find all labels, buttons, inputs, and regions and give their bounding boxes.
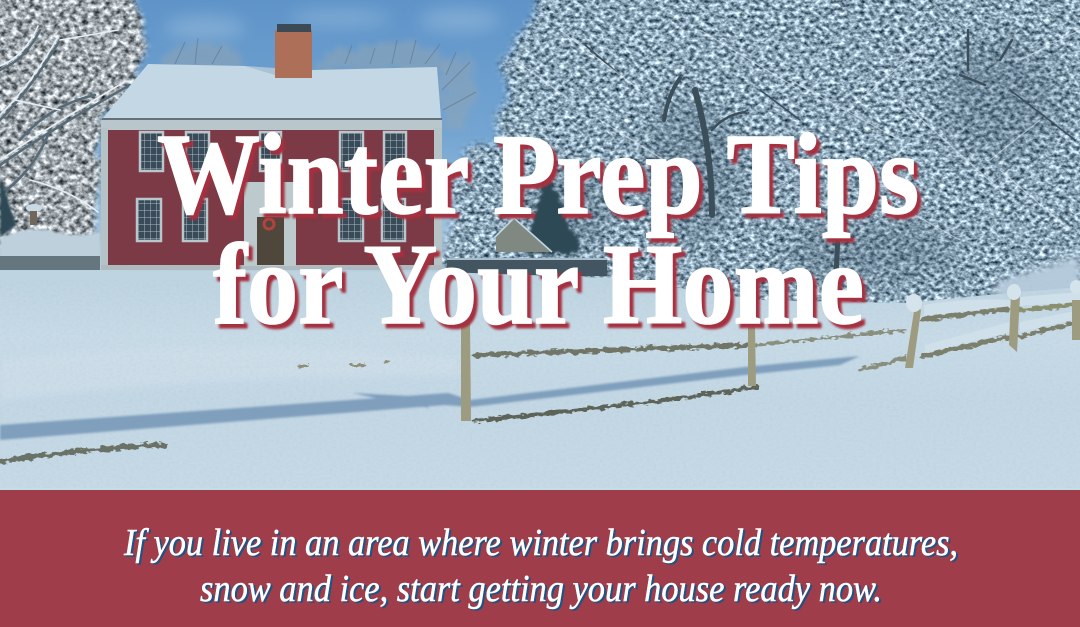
roof [103,64,441,118]
clouds [165,8,500,40]
panel: red intro band [0,490,1080,627]
shaded tree masses [525,40,1060,280]
left conifer and snowy shrubs [0,175,16,238]
intro text [123,522,960,612]
door surround [244,182,296,266]
shed [494,218,552,252]
fence shadow [0,356,860,440]
tree: right snowy trees [442,0,1080,303]
tree: left snowy tree [0,0,146,258]
sky [0,0,1080,300]
intro text: If you live in an area where winter brings cold temperatures, [123,522,958,564]
left buried rail [0,445,165,461]
windows [137,132,406,241]
title: for Your Home [213,221,864,349]
dark conifer [522,172,582,252]
title [157,111,919,349]
snowy mounds [990,255,1080,300]
snowfield [0,270,1080,490]
posts [461,292,1080,421]
photo: snowy house scene [0,0,1080,490]
title: Winter Prep Tips [157,111,919,239]
bottom rails [475,387,757,421]
intro text: snow and ice, start getting your house ready now. [202,570,884,612]
top rails [475,345,748,355]
chimney [275,30,312,78]
house [101,24,442,270]
intro text: If you live in an area where winter brings cold temperatures, [125,524,960,566]
fence [0,280,1080,461]
wreath [264,219,274,229]
trunks and branches [515,30,1080,275]
far fence [0,256,607,276]
bare trees behind house [160,38,478,130]
wall [107,130,435,265]
intro text: snow and ice, start getting your house ready now. [200,568,882,610]
